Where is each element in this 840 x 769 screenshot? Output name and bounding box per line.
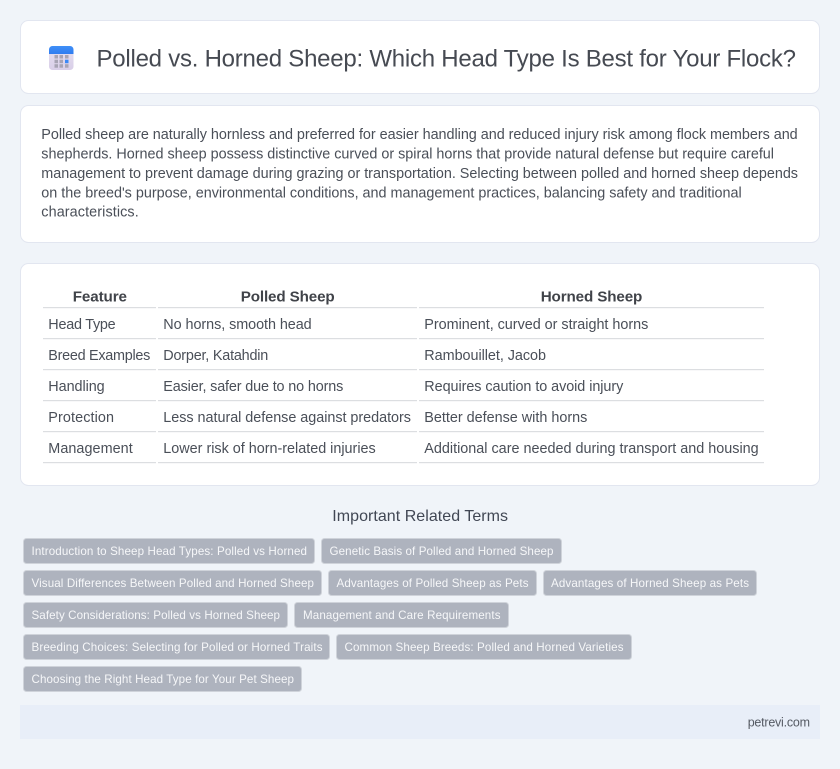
table row: handling — [43, 379, 764, 401]
footer — [20, 705, 820, 739]
tag: Advantages of Polled Sheep as Pets — [336, 577, 529, 590]
heading: important related terms: Important Related Terms — [332, 508, 508, 525]
tag — [24, 570, 322, 596]
table header row — [43, 288, 764, 308]
tag — [328, 570, 536, 596]
tag — [24, 666, 302, 692]
tag — [24, 538, 314, 564]
text block: introduction paragraph: shepherds. Horned sheep possess distinctive curved or spiral horns that provide natural defense but require careful — [41, 146, 774, 162]
table row: head type: Prominent, curved or straight horns — [424, 317, 648, 333]
tag: Common Sheep Breeds: Polled and Horned Varieties — [344, 641, 624, 654]
table header row: Feature — [73, 288, 127, 306]
table row: handling: Handling — [48, 379, 105, 395]
footer: petrevi.com — [748, 715, 810, 729]
tag — [322, 538, 562, 564]
table row: handling: Easier, safer due to no horns — [163, 379, 343, 395]
tag: Genetic Basis of Polled and Horned Sheep — [330, 545, 554, 558]
table row: breed examples: Breed Examples — [48, 348, 150, 364]
table row: management: Management — [48, 441, 133, 457]
panel: introduction — [20, 106, 820, 242]
table row: breed examples: Dorper, Katahdin — [163, 348, 268, 364]
text block: introduction paragraph — [41, 127, 798, 221]
text block: introduction paragraph: characteristics. — [41, 205, 139, 221]
tag — [24, 634, 330, 660]
tag: Choosing the Right Head Type for Your Pet Sheep — [32, 673, 294, 686]
tag: Safety Considerations: Polled vs Horned Sheep — [32, 609, 280, 622]
text block: introduction paragraph: on the breed's purpose, environmental conditions, and management practices, balancing safety and traditional — [41, 186, 742, 202]
table row: head type: No horns, smooth head — [163, 317, 312, 333]
table row: protection: Protection — [48, 410, 114, 426]
tag — [544, 570, 756, 596]
panel: related term tags — [24, 538, 756, 692]
title: Polled vs. Horned Sheep: Which Head Type Is Best for Your Flock? — [96, 46, 796, 73]
table row: protection: Less natural defense against predators — [163, 410, 411, 426]
text block: introduction paragraph: management to prevent damage during grazing or transportation. Selecting between polled and horned sheep depends — [41, 166, 798, 182]
tag: Advantages of Horned Sheep as Pets — [551, 577, 749, 590]
panel: comparison table — [20, 264, 820, 486]
tag — [24, 602, 288, 628]
table row: breed examples: Rambouillet, Jacob — [424, 348, 546, 364]
tag — [336, 634, 632, 660]
table row: management: Additional care needed during transport and housing — [424, 441, 759, 457]
table row: breed examples — [43, 348, 764, 370]
table row: head type: Head Type — [48, 317, 116, 333]
tag: Breeding Choices: Selecting for Polled or Horned Traits — [32, 641, 323, 654]
table row: protection: Better defense with horns — [424, 410, 587, 426]
table row: head type — [43, 317, 764, 339]
tag: Introduction to Sheep Head Types: Polled vs Horned — [32, 545, 307, 558]
table row: handling: Requires caution to avoid injury — [424, 379, 624, 395]
icon: calendar — [49, 46, 74, 70]
text block: introduction paragraph: Polled sheep are naturally hornless and preferred for easier handling and reduced injury risk among flock members and — [41, 127, 798, 143]
tag: Visual Differences Between Polled and Horned Sheep — [32, 577, 314, 590]
table row: protection — [43, 410, 764, 432]
tag: Management and Care Requirements — [303, 609, 501, 622]
tag — [294, 602, 508, 628]
panel: title header — [20, 20, 820, 94]
table row: management — [43, 441, 764, 463]
table header row: Polled Sheep — [241, 288, 335, 306]
table header row: Horned Sheep — [541, 288, 642, 306]
table row: management: Lower risk of horn-related injuries — [163, 441, 376, 457]
